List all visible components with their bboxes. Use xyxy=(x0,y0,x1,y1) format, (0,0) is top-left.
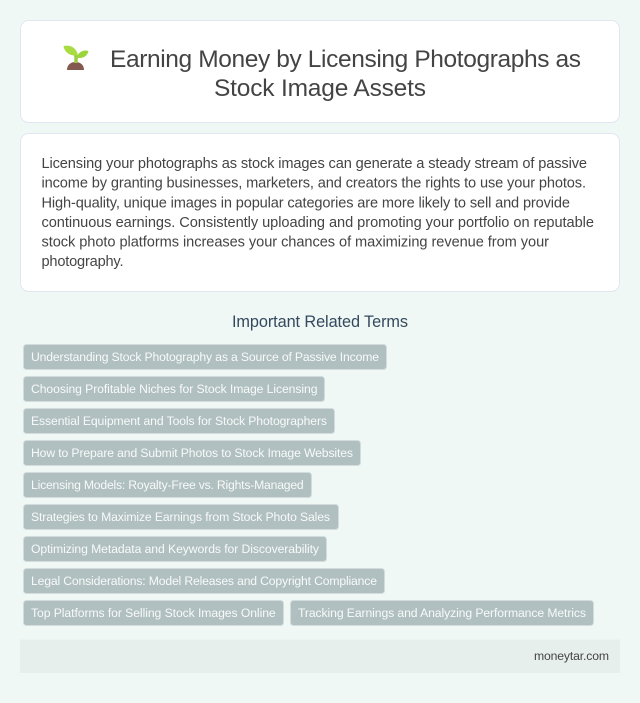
chip 10: Tracking Earnings and Analyzing Performance Metrics xyxy=(298,606,586,620)
panel: summary card xyxy=(20,134,620,292)
chip 5: Licensing Models: Royalty-Free vs. Rights-Managed xyxy=(31,478,304,492)
chip 7 xyxy=(24,536,326,562)
chip 5 xyxy=(24,472,312,498)
heading: important related terms: Important Related Terms xyxy=(232,313,408,331)
chip 1 xyxy=(24,344,386,370)
title: Stock Image Assets xyxy=(214,75,426,102)
footer bar xyxy=(20,640,620,673)
footer source text: moneytar.com xyxy=(534,649,609,663)
summary text: photography. xyxy=(42,254,124,270)
summary text: continuous earnings. Consistently uploading and promoting your portfolio on reputable xyxy=(42,215,594,231)
chip 6: Strategies to Maximize Earnings from Stock Photo Sales xyxy=(31,510,330,524)
chip 1: Understanding Stock Photography as a Source of Passive Income xyxy=(31,350,379,364)
chip 3 xyxy=(24,408,334,434)
panel: title card xyxy=(20,20,620,122)
chip 10 xyxy=(290,600,594,626)
chip 2 xyxy=(24,376,324,402)
chip 4 xyxy=(24,440,360,466)
panel: related term chips xyxy=(24,344,594,626)
chip 8: Legal Considerations: Model Releases and Copyright Compliance xyxy=(31,574,377,588)
chip 2: Choosing Profitable Niches for Stock Image Licensing xyxy=(31,382,318,396)
title: Earning Money by Licensing Photographs as xyxy=(110,46,581,73)
icon: seedling xyxy=(64,46,88,70)
chip 8 xyxy=(24,568,384,594)
summary text: stock photo platforms increases your chances of maximizing revenue from your xyxy=(42,234,549,250)
summary text: High-quality, unique images in popular categories are more likely to sell and provide xyxy=(42,195,570,211)
chip 9: Top Platforms for Selling Stock Images Online xyxy=(31,606,276,620)
chip 3: Essential Equipment and Tools for Stock Photographers xyxy=(31,414,327,428)
chip 4: How to Prepare and Submit Photos to Stock Image Websites xyxy=(31,446,353,460)
summary text xyxy=(42,156,594,270)
summary text: income by granting businesses, marketers, and creators the rights to use your photos. xyxy=(42,176,586,192)
chip 7: Optimizing Metadata and Keywords for Discoverability xyxy=(31,542,320,556)
summary text: Licensing your photographs as stock images can generate a steady stream of passive xyxy=(42,156,587,172)
chip 6 xyxy=(24,504,338,530)
chip 9 xyxy=(24,600,284,626)
title xyxy=(110,46,581,102)
